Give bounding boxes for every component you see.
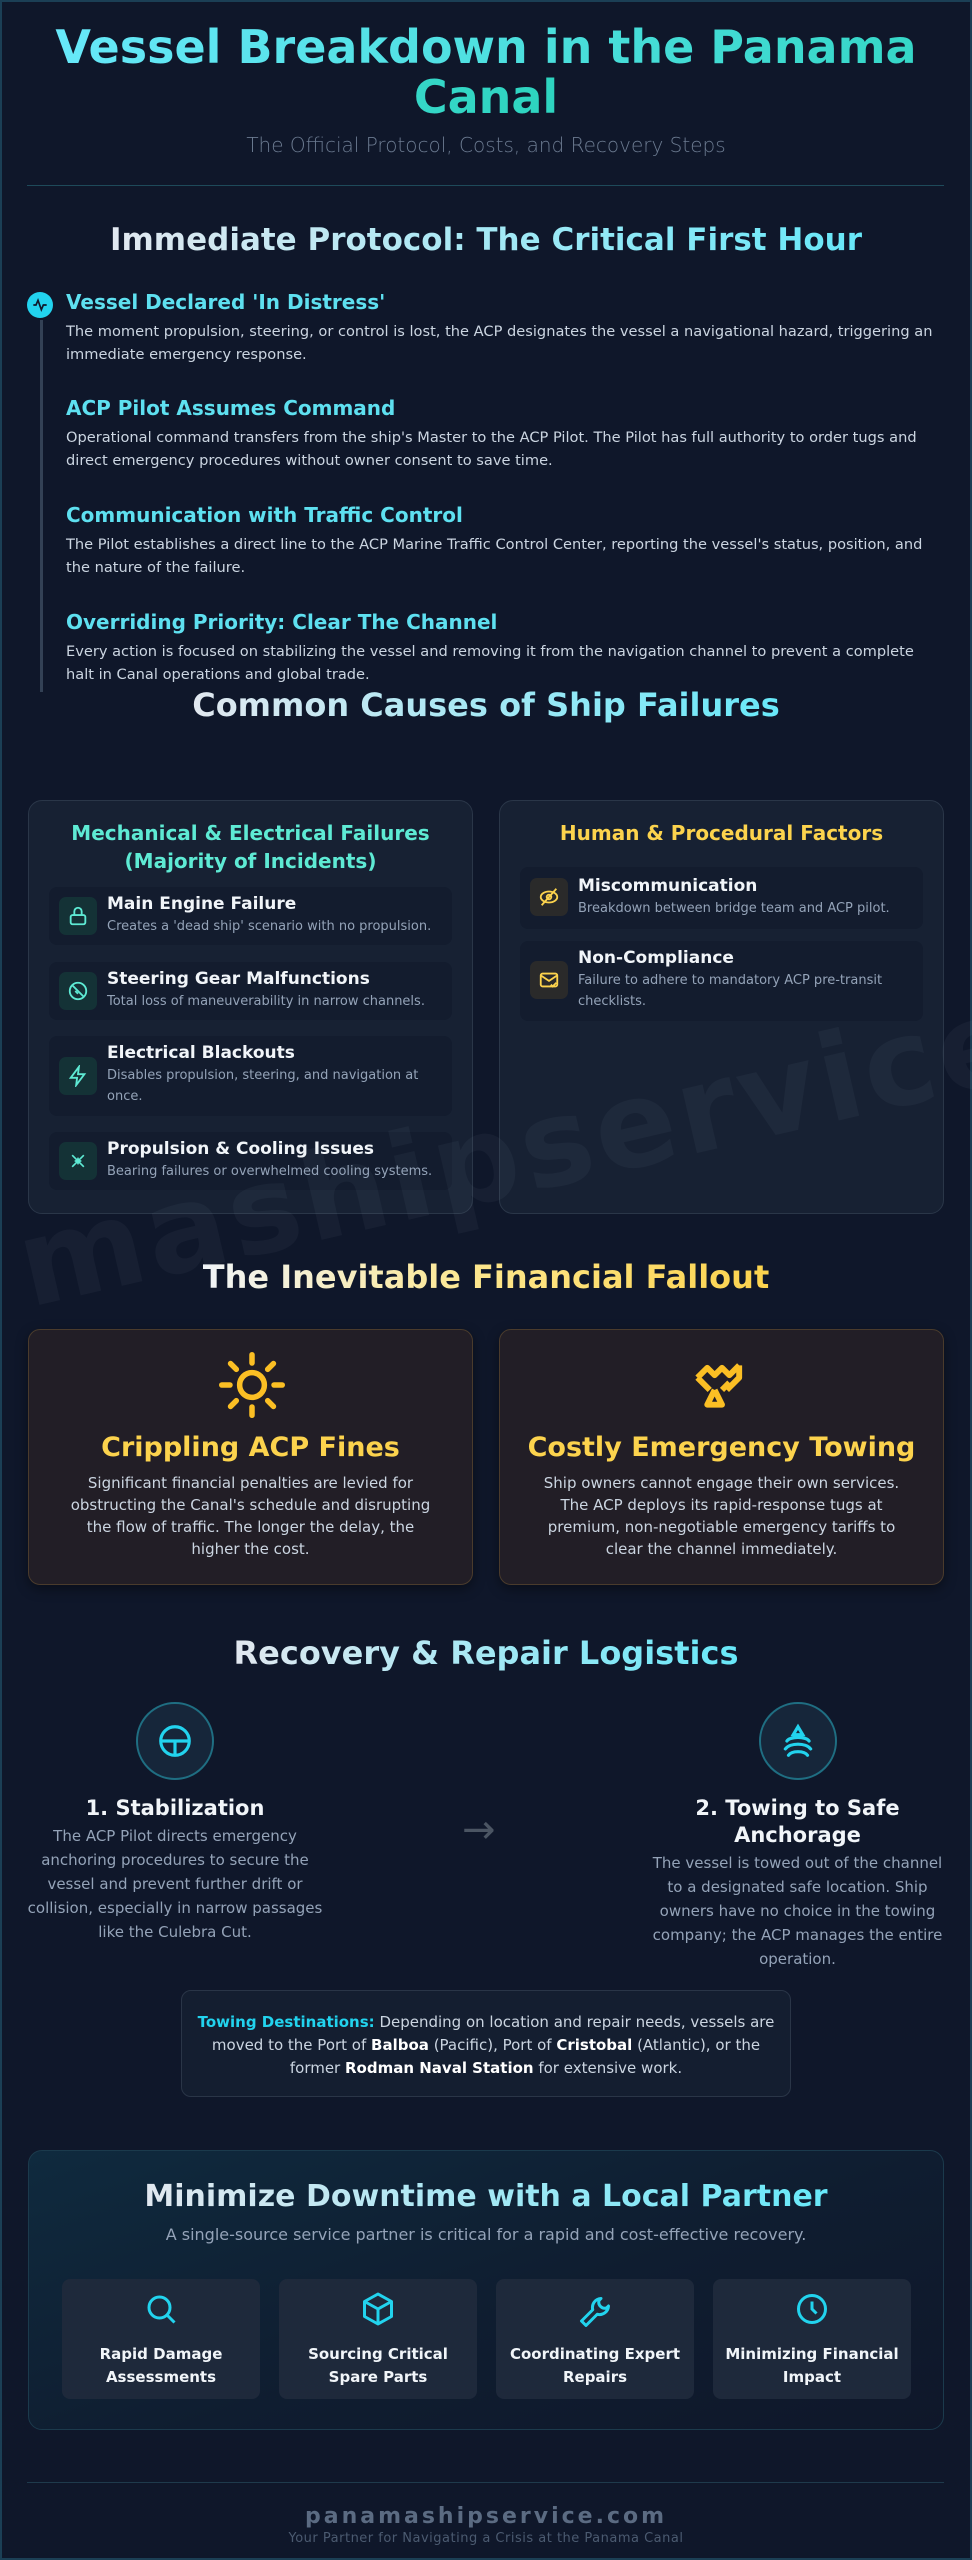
item: propulsion: Bearing failures or overwhelmed cooling systems. (107, 1164, 432, 1179)
card: repairs (496, 2279, 694, 2399)
item: miscommunication (520, 867, 923, 929)
item: steering: Total loss of maneuverability in narrow channels. (107, 994, 425, 1009)
item: propulsion: Propulsion & Cooling Issues (107, 1139, 374, 1159)
heading: immediate protocol: Immediate Protocol: The Critical First Hour (110, 222, 862, 258)
heading: common causes: Common Causes of Ship Failures (192, 686, 780, 724)
card: financial (713, 2279, 911, 2399)
item: electrical: Electrical Blackouts (107, 1043, 295, 1063)
step: towing: The vessel is towed out of the channel to a designated safe location. Ship owners have no choice in the towing company; the ACP manages the entire operation. (653, 1854, 942, 1968)
title: Canal (414, 70, 558, 124)
panel: local partner: A single-source service partner is critical for a rapid and cost-effective recovery. (166, 2225, 806, 2244)
item: steering (49, 962, 452, 1020)
icon: sun (219, 1352, 285, 1418)
card: towing (499, 1329, 944, 1585)
step 4 (66, 610, 914, 683)
step 2 (66, 396, 917, 469)
icon: tow (695, 1363, 742, 1408)
panel: human: Human & Procedural Factors (560, 821, 883, 845)
item: non-compliance: Failure to adhere to mandatory ACP pre-transit checklists. (578, 973, 882, 1009)
panel: human (499, 800, 944, 1214)
step 3: The Pilot establishes a direct line to the ACP Marine Traffic Control Center, reporting the vessel's status, position, and the nature of the failure. (66, 536, 922, 576)
card: parts: Spare Parts (329, 2368, 427, 2386)
card: damage (62, 2279, 260, 2399)
icon: tug circle (758, 1702, 836, 1780)
item: main engine: Creates a 'dead ship' scenario with no propulsion. (107, 919, 431, 934)
card: fines: Significant financial penalties are levied for obstructing the Canal's schedule and disrupting the flow of traffic. The longer the delay, the higher the cost. (71, 1474, 430, 1558)
step 3 (66, 503, 922, 576)
item: main engine: Main Engine Failure (107, 894, 296, 914)
card: financial: Minimizing Financial (725, 2345, 899, 2363)
panel: mechanical (28, 800, 473, 1214)
item: non-compliance: Non-Compliance (578, 948, 734, 968)
icon: pulse (27, 292, 53, 318)
footer (288, 2504, 683, 2546)
card: repairs: Coordinating Expert (510, 2345, 680, 2363)
item: non-compliance (520, 941, 923, 1021)
item: miscommunication: Breakdown between bridge team and ACP pilot. (578, 901, 890, 916)
panel: mechanical: Mechanical & Electrical Failures (71, 821, 430, 845)
step 3: Communication with Traffic Control (66, 503, 463, 527)
panel: local partner (28, 2150, 944, 2430)
step: towing: 2. Towing to Safe (695, 1796, 900, 1820)
card: damage: Rapid Damage (100, 2345, 222, 2363)
step 1: Vessel Declared 'In Distress' (66, 290, 385, 314)
icon: anchor circle (136, 1702, 214, 1780)
card: parts (279, 2279, 477, 2399)
item: propulsion (49, 1132, 452, 1190)
step 4: Overriding Priority: Clear The Channel (66, 610, 497, 634)
step 1 (66, 290, 932, 363)
panel: local partner: Minimize Downtime with a Local Partner (144, 2179, 828, 2214)
card: fines (28, 1329, 473, 1585)
subtitle: The Official Protocol, Costs, and Recovery Steps (246, 133, 726, 157)
callout: towing destinations (181, 1990, 791, 2097)
card: repairs: Repairs (563, 2368, 627, 2386)
step: towing (652, 1702, 942, 1968)
panel: mechanical: (Majority of Incidents) (125, 849, 376, 873)
step: towing: Anchorage (734, 1823, 861, 1847)
step: stabilization: The ACP Pilot directs emergency anchoring procedures to secure the vessel and prevent further drift or collision, especially in narrow passages like the Culebra Cut. (28, 1827, 322, 1941)
title: Vessel Breakdown in the Panama (55, 20, 917, 74)
card: towing: Ship owners cannot engage their own services. The ACP deploys its rapid-response tugs at premium, non-negotiable emergency tariffs to clear the channel immediately. (544, 1474, 899, 1558)
item: electrical (49, 1036, 452, 1116)
item: miscommunication: Miscommunication (578, 876, 757, 896)
title (55, 20, 917, 124)
step: stabilization: 1. Stabilization (86, 1796, 264, 1820)
timeline (27, 290, 932, 692)
step 2: ACP Pilot Assumes Command (66, 396, 395, 420)
step 1: The moment propulsion, steering, or control is lost, the ACP designates the vessel a navigational hazard, triggering an immediate emergency response. (66, 323, 932, 363)
step: stabilization (28, 1702, 322, 1941)
heading: financial fallout: The Inevitable Financial Fallout (203, 1258, 769, 1296)
footer: panamashipservice.com (305, 2504, 667, 2529)
card: towing: Costly Emergency Towing (528, 1432, 915, 1463)
footer: Your Partner for Navigating a Crisis at the Panama Canal (289, 2531, 683, 2546)
card: financial: Impact (783, 2368, 841, 2386)
item: main engine (49, 887, 452, 945)
card: parts: Sourcing Critical (308, 2345, 448, 2363)
card: damage: Assessments (106, 2368, 216, 2386)
heading: recovery: Recovery & Repair Logistics (234, 1634, 738, 1672)
callout: towing destinations: Towing Destinations: Depending on location and repair needs, vessels are moved to the Port of Balboa (Pacific), Port of Cristobal (Atlantic), or the former Rodman Naval Station for extensive work. (198, 2013, 774, 2077)
step 2: Operational command transfers from the ship's Master to the ACP Pilot. The Pilot has full authority to order tugs and direct emergency procedures without owner consent to save time. (66, 429, 917, 469)
item: electrical: Disables propulsion, steering, and navigation at once. (107, 1068, 418, 1104)
step 4: Every action is focused on stabilizing the vessel and removing it from the navigation channel to prevent a complete halt in Canal operations and global trade. (66, 643, 914, 683)
item: steering: Steering Gear Malfunctions (107, 969, 370, 989)
card: fines: Crippling ACP Fines (101, 1432, 400, 1463)
arrow: → (462, 1807, 496, 1853)
